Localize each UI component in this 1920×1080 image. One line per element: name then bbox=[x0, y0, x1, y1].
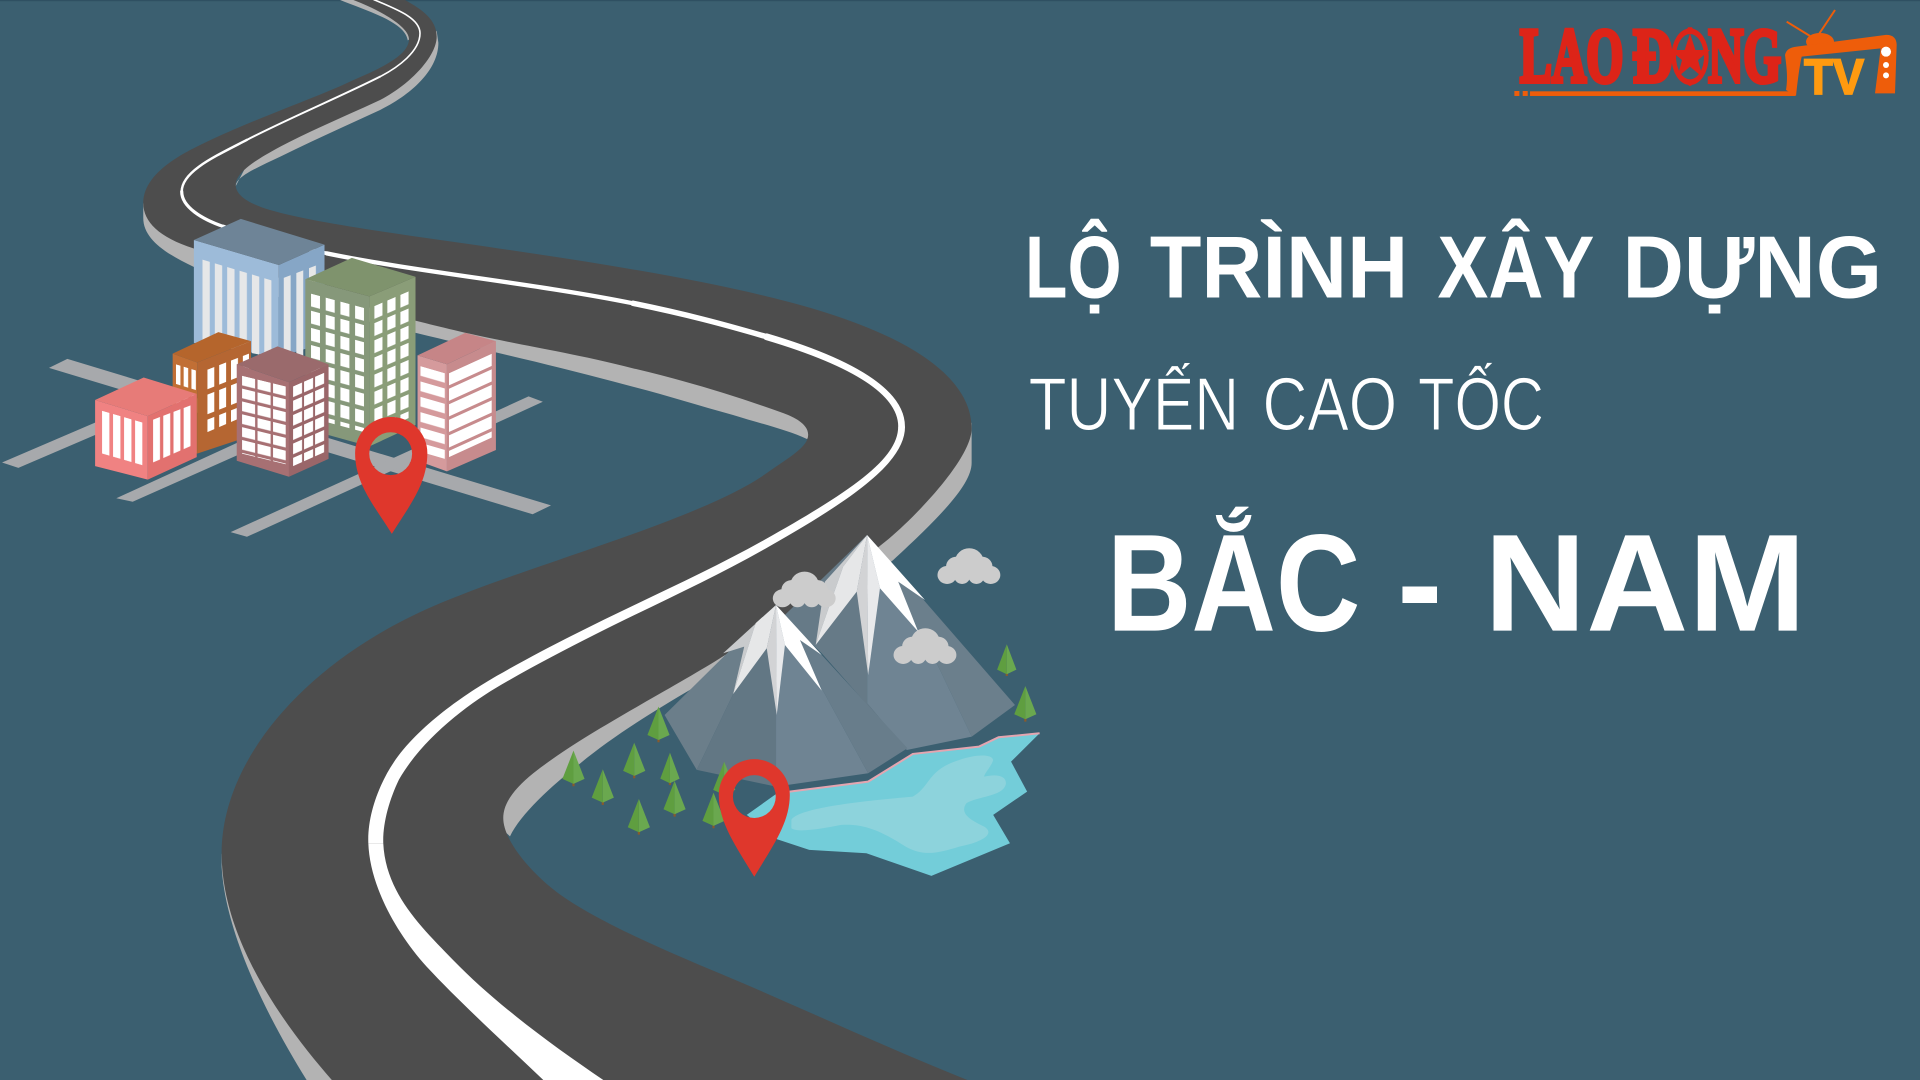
title line 2: TỐC bbox=[1418, 362, 1544, 446]
back mountain bbox=[783, 535, 1015, 750]
building: green tower bbox=[305, 258, 416, 446]
cloud left bbox=[773, 572, 836, 607]
title line 1: TRÌNH bbox=[1150, 218, 1408, 317]
winding highway road bbox=[143, 0, 972, 1080]
title line 3 bbox=[1107, 505, 1806, 661]
logo star emblem bbox=[1670, 28, 1710, 85]
city illustration bbox=[2, 219, 551, 537]
road side strips bbox=[143, 0, 972, 1080]
logo: Lao Dong TV bbox=[1514, 10, 1897, 105]
pine trees bbox=[562, 644, 1036, 835]
title line 2 bbox=[1029, 362, 1544, 446]
mountain landscape bbox=[562, 535, 1040, 876]
road centre line widening foreground bbox=[368, 843, 618, 1080]
back mountain snow bbox=[816, 535, 925, 675]
title line 1 bbox=[1025, 218, 1882, 317]
title line 2: TUYẾN bbox=[1029, 362, 1239, 446]
title line 3: BẮC bbox=[1107, 505, 1360, 661]
cloud lower right bbox=[894, 628, 956, 664]
logo wordmark bbox=[1520, 13, 1781, 99]
title line 1: LỘ bbox=[1025, 218, 1122, 317]
road centre line bbox=[182, 0, 902, 427]
building: pink block bbox=[95, 378, 197, 480]
logo underline bbox=[1514, 91, 1795, 96]
logo wordmark: Ộ bbox=[1675, 26, 1705, 87]
logo wordmark: Đ bbox=[1633, 13, 1673, 99]
map pin: mountains bbox=[719, 759, 790, 877]
title line 3: NAM bbox=[1484, 507, 1806, 661]
logo TV set: TV bbox=[1804, 49, 1864, 105]
title line 3: - bbox=[1397, 507, 1442, 661]
road asphalt bbox=[143, 0, 972, 1080]
road centre line middle widening bbox=[368, 427, 905, 843]
building: mauve block bbox=[237, 346, 329, 477]
logo wordmark: LAO bbox=[1520, 13, 1623, 99]
logo wordmark: NG bbox=[1708, 13, 1781, 99]
building: orange block bbox=[173, 332, 251, 454]
city streets bbox=[2, 359, 551, 537]
front mountain snow bbox=[723, 605, 822, 715]
building: blue tower bbox=[194, 219, 324, 357]
logo TV set bbox=[1785, 10, 1897, 105]
building: rose block bbox=[418, 333, 496, 471]
title line 1: DỰNG bbox=[1622, 218, 1882, 317]
map pin: city bbox=[355, 417, 427, 534]
title line 1: XÂY bbox=[1438, 218, 1594, 317]
cloud top right bbox=[937, 548, 1000, 584]
title line 2: CAO bbox=[1262, 362, 1397, 446]
lake bbox=[747, 733, 1040, 876]
front mountain bbox=[665, 605, 907, 787]
